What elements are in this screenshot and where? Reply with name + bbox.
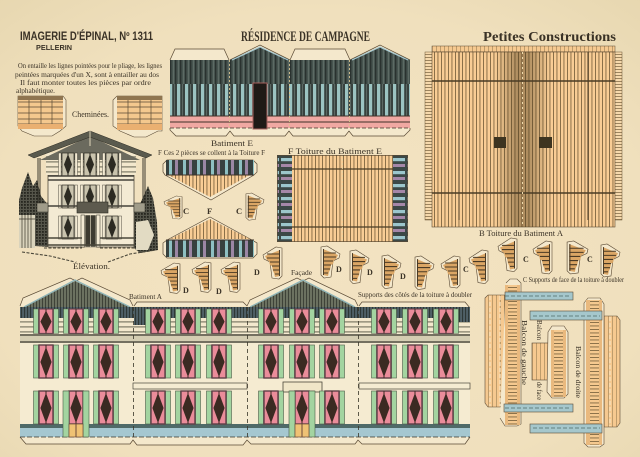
text block: instructions: peintées marquées d'un X, sont à entailler au dos bbox=[15, 70, 159, 79]
text block: instructions: On entaille les lignes pointées pour le pliage, les lignes bbox=[18, 61, 162, 70]
windows: lower row bbox=[34, 391, 458, 424]
heading: publisher: PELLERIN bbox=[36, 45, 72, 52]
letters D and C: D bbox=[400, 272, 406, 281]
letters D and C bbox=[183, 255, 593, 296]
label: balcon de face bbox=[535, 320, 543, 400]
letters D and C: D bbox=[183, 286, 189, 295]
chimney piece left bbox=[18, 96, 66, 136]
wall bbox=[20, 307, 470, 437]
heading: publisher: IMAGERIE D'ÉPINAL, Nº 1311 bbox=[20, 30, 153, 43]
label: building A: Batiment A bbox=[129, 292, 163, 301]
building E bbox=[170, 45, 410, 136]
balcon de face bbox=[532, 326, 568, 398]
door bbox=[253, 83, 267, 129]
fold lines bbox=[134, 307, 358, 437]
gables bbox=[24, 281, 130, 307]
building E tabs bbox=[170, 45, 410, 136]
ground band bbox=[20, 424, 470, 429]
large roof of building A bbox=[425, 46, 622, 227]
letters D and C: D bbox=[367, 268, 373, 277]
subtitle: Petites Constructions bbox=[483, 30, 617, 45]
ground bbox=[22, 248, 156, 262]
label: side supports: Supports des côtés de la toiture à doubler bbox=[358, 290, 472, 299]
label: elevation: Élévation. bbox=[73, 261, 110, 271]
roof openings bbox=[494, 137, 506, 148]
door bbox=[81, 215, 100, 247]
label: toiture E: F Toiture du Batiment E bbox=[288, 146, 382, 156]
brackets: support row D bbox=[161, 246, 488, 293]
elevation drawing of the house bbox=[19, 131, 158, 262]
facade of building A bbox=[20, 278, 470, 445]
balcony bbox=[77, 202, 108, 213]
balcon de droite bbox=[530, 298, 620, 447]
posts and side balconies bbox=[38, 158, 145, 203]
letters D and C: C bbox=[587, 255, 593, 264]
brackets: F gable set bbox=[164, 193, 264, 220]
text block: instructions bbox=[15, 61, 162, 95]
balcony ledges bbox=[133, 383, 247, 389]
roof of building E bbox=[277, 155, 408, 242]
text block: instructions: alphabétique. bbox=[16, 86, 55, 95]
trees bbox=[19, 172, 158, 253]
gable piece F lower bbox=[163, 217, 257, 258]
letters C F C: F bbox=[207, 206, 212, 216]
balcony pieces bbox=[485, 279, 620, 447]
gable piece F upper bbox=[163, 160, 257, 200]
fence bbox=[19, 215, 35, 248]
heading: publisher bbox=[20, 30, 153, 52]
tabs bbox=[20, 278, 470, 445]
label: balcon de gauche: Balcon de gauche bbox=[520, 320, 529, 386]
label: toiture A: B Toiture du Batiment A bbox=[479, 228, 564, 238]
windows bbox=[58, 153, 78, 176]
letters D and C: C bbox=[463, 265, 469, 274]
title: RÉSIDENCE DE CAMPAGNE bbox=[241, 28, 370, 45]
chimney piece right bbox=[113, 96, 162, 137]
label: F pieces glued: F Ces 2 pièces se collent à la Toiture F bbox=[158, 148, 265, 157]
roof band bbox=[20, 307, 470, 318]
letters C F C bbox=[183, 206, 242, 216]
letters C F C: C bbox=[183, 206, 189, 216]
letters D and C: D bbox=[254, 268, 260, 277]
brackets: face supports C bbox=[498, 238, 620, 277]
balcon de gauche bbox=[485, 279, 573, 426]
letters C F C: C bbox=[236, 206, 242, 216]
label: balcon de face: de face bbox=[535, 382, 543, 400]
label: balcon de droite: Balcon de droite bbox=[574, 346, 583, 399]
roof bbox=[40, 136, 140, 160]
label: building E: Batiment E bbox=[211, 138, 253, 148]
walls bbox=[48, 175, 134, 247]
windows: middle row bbox=[34, 345, 458, 378]
label: chimneys: Cheminées. bbox=[72, 110, 109, 119]
letters D and C: C bbox=[523, 255, 529, 264]
doors bbox=[63, 391, 315, 437]
text block: instructions: Il faut monter toutes les pièces par ordre bbox=[20, 78, 152, 87]
windows: top row bbox=[34, 309, 458, 333]
letters D and C: D bbox=[216, 287, 222, 296]
letters D and C: D bbox=[336, 265, 342, 274]
porch bbox=[283, 382, 322, 392]
label: balcon de face: Balcon bbox=[535, 320, 543, 341]
label: facade: Façade bbox=[291, 268, 313, 277]
